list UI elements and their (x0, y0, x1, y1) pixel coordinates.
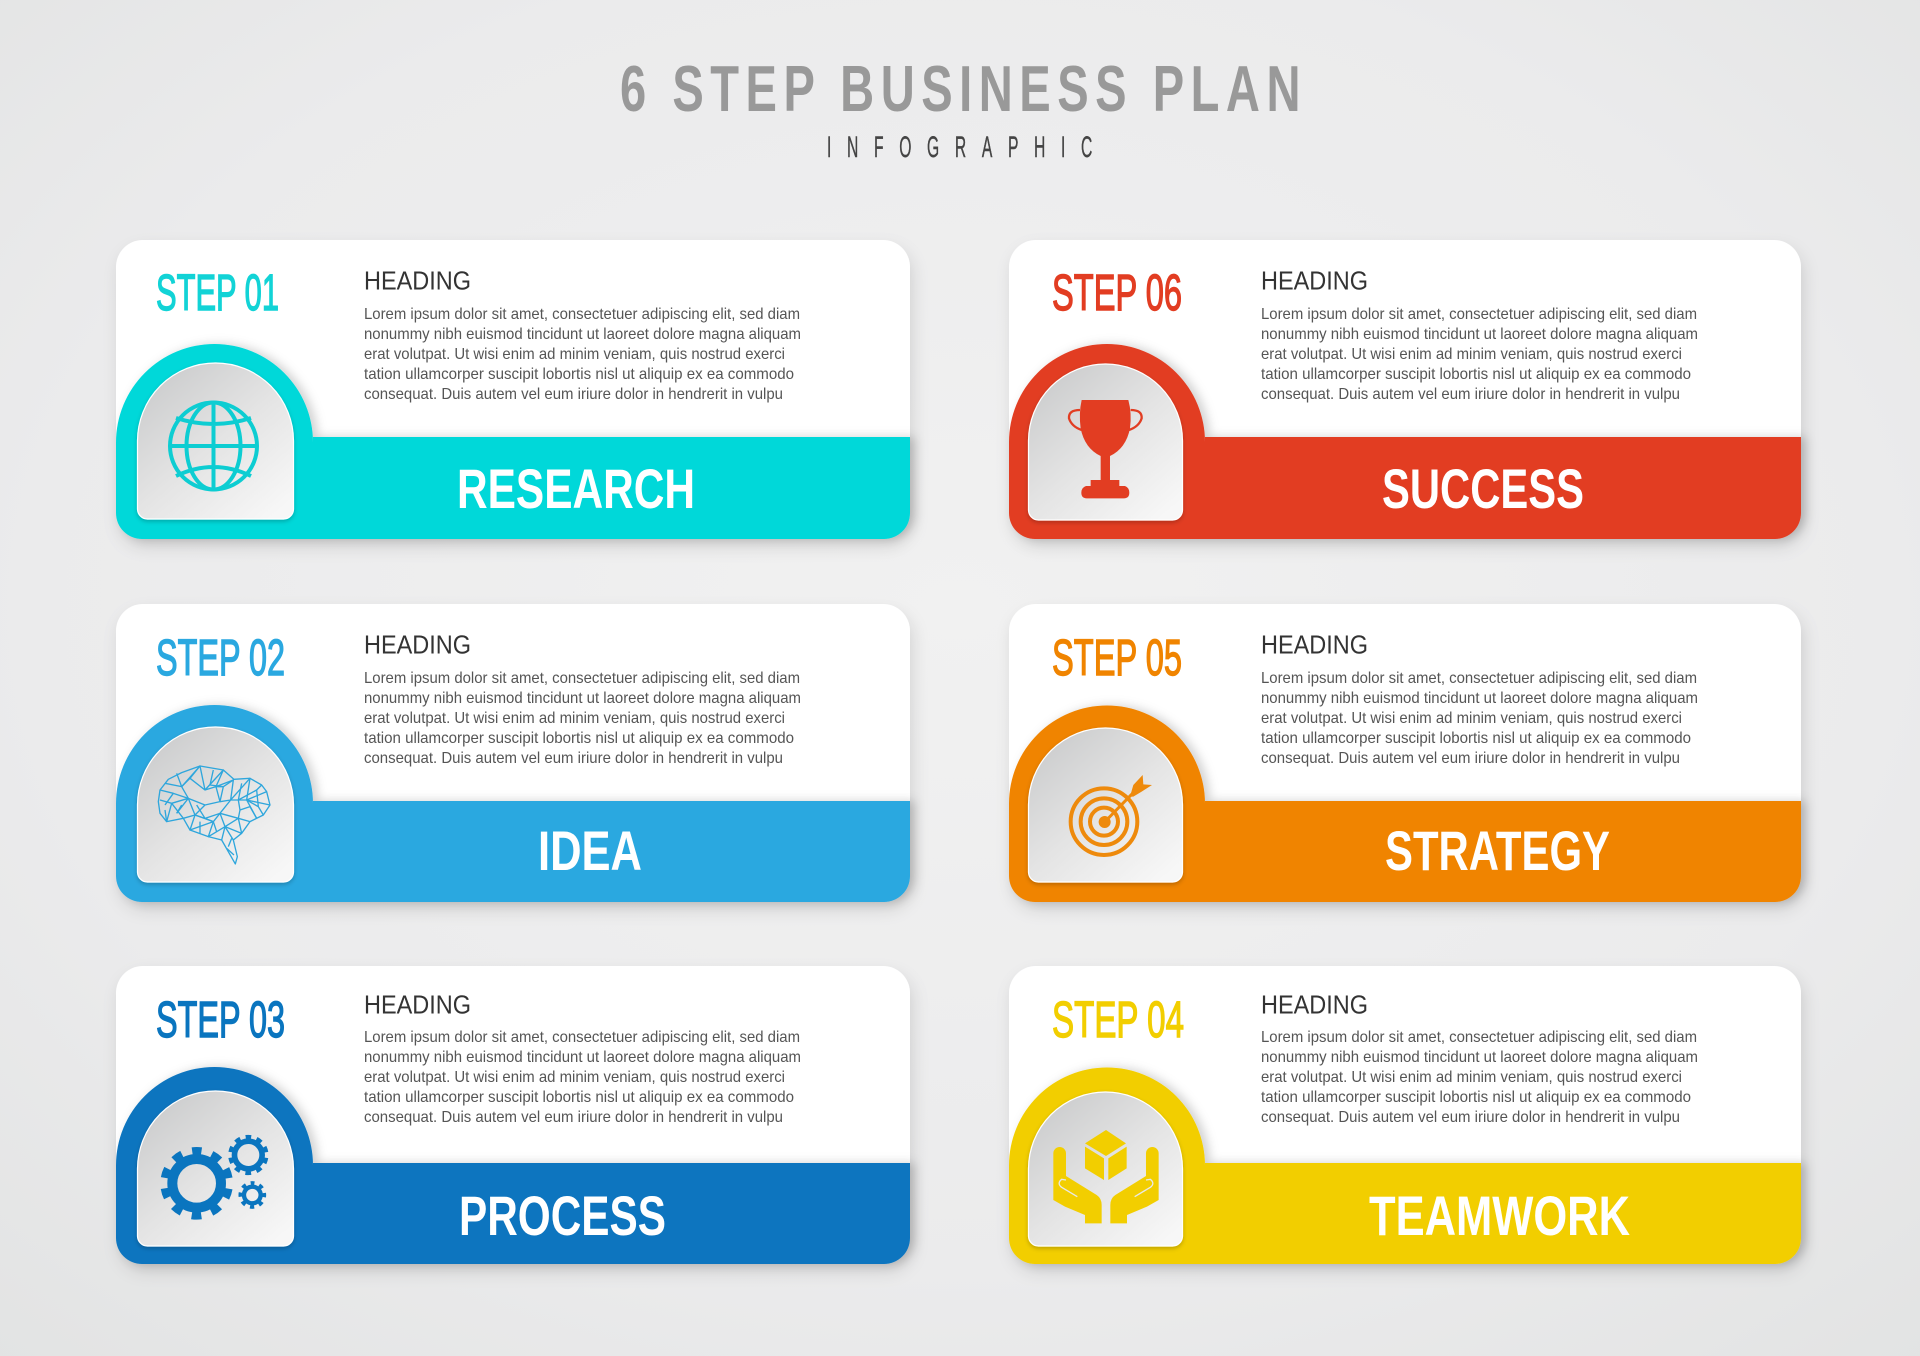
body text (364, 1029, 801, 1126)
heading: HEADING (1261, 266, 1368, 296)
icon well (1028, 1092, 1182, 1246)
body text: nonummy nibh euismod tincidunt ut laoreet dolore magna aliquam (1261, 326, 1698, 343)
body text: tation ullamcorper suscipit lobortis nisl ut aliquip ex ea commodo (1261, 1089, 1691, 1106)
step label: STEP 05 (1052, 629, 1182, 686)
panel: step 06 success (1009, 240, 1801, 539)
body text: Lorem ipsum dolor sit amet, consectetuer adipiscing elit, sed diam (1261, 670, 1697, 687)
colour band with arch (116, 1067, 910, 1264)
band label: TEAMWORK (1369, 1184, 1630, 1247)
card background (116, 240, 910, 539)
colour band with arch (1009, 344, 1801, 539)
body text: erat volutpat. Ut wisi enim ad minim veniam, quis nostrud exerci (364, 710, 785, 727)
body text: Lorem ipsum dolor sit amet, consectetuer adipiscing elit, sed diam (364, 670, 800, 687)
icon: brain (158, 766, 270, 864)
body text: consequat. Duis autem vel eum iriure dolor in hendrerit in vulpu (364, 750, 783, 767)
heading: HEADING (364, 630, 471, 660)
band label: IDEA (538, 819, 642, 882)
heading: HEADING (364, 990, 471, 1020)
colour band with arch (116, 705, 910, 902)
body text: Lorem ipsum dolor sit amet, consectetuer adipiscing elit, sed diam (364, 1029, 800, 1046)
band label: RESEARCH (457, 457, 695, 520)
icon well (1028, 364, 1182, 520)
body text: tation ullamcorper suscipit lobortis nisl ut aliquip ex ea commodo (1261, 366, 1691, 383)
heading: HEADING (1261, 990, 1368, 1020)
card background (1009, 604, 1801, 902)
subtitle: INFOGRAPHIC (827, 131, 1108, 164)
body text: consequat. Duis autem vel eum iriure dolor in hendrerit in vulpu (1261, 1109, 1680, 1126)
title: 6 STEP BUSINESS PLAN (620, 52, 1307, 125)
body text: Lorem ipsum dolor sit amet, consectetuer adipiscing elit, sed diam (1261, 1029, 1697, 1046)
icon well (138, 363, 294, 519)
card background (1009, 240, 1801, 539)
body text: consequat. Duis autem vel eum iriure dolor in hendrerit in vulpu (364, 386, 783, 403)
band label: SUCCESS (1382, 457, 1584, 520)
body text (364, 306, 801, 403)
band label: PROCESS (459, 1184, 666, 1247)
panel: step 01 research (116, 240, 910, 539)
body text: nonummy nibh euismod tincidunt ut laoreet dolore magna aliquam (364, 1049, 801, 1066)
icon: globe (170, 402, 257, 490)
colour band with arch (1009, 1068, 1801, 1264)
band label: STRATEGY (1385, 819, 1610, 882)
body text: erat volutpat. Ut wisi enim ad minim veniam, quis nostrud exerci (364, 346, 785, 363)
body text: nonummy nibh euismod tincidunt ut laoreet dolore magna aliquam (364, 326, 801, 343)
body text (1261, 1029, 1698, 1126)
icon well (1028, 728, 1182, 882)
step label: STEP 03 (156, 991, 285, 1048)
panel: step 05 strategy (1009, 604, 1801, 902)
body text: tation ullamcorper suscipit lobortis nisl ut aliquip ex ea commodo (364, 366, 794, 383)
body text: nonummy nibh euismod tincidunt ut laoreet dolore magna aliquam (364, 690, 801, 707)
body text: erat volutpat. Ut wisi enim ad minim veniam, quis nostrud exerci (1261, 1069, 1682, 1086)
icon: trophy (1069, 400, 1142, 498)
body text: nonummy nibh euismod tincidunt ut laoreet dolore magna aliquam (1261, 1049, 1698, 1066)
step label: STEP 06 (1052, 264, 1182, 321)
step label: STEP 04 (1052, 991, 1184, 1048)
body text: Lorem ipsum dolor sit amet, consectetuer adipiscing elit, sed diam (364, 306, 800, 323)
icon: target (1071, 775, 1152, 855)
step label: STEP 01 (156, 264, 279, 321)
body text: erat volutpat. Ut wisi enim ad minim veniam, quis nostrud exerci (1261, 710, 1682, 727)
panel: step 04 teamwork (1009, 966, 1801, 1264)
panel: step 03 process (116, 966, 910, 1264)
step label: STEP 02 (156, 629, 285, 686)
card background (116, 966, 910, 1264)
body text: erat volutpat. Ut wisi enim ad minim veniam, quis nostrud exerci (364, 1069, 785, 1086)
icon well (138, 1091, 294, 1246)
body text: tation ullamcorper suscipit lobortis nisl ut aliquip ex ea commodo (1261, 730, 1691, 747)
body text: consequat. Duis autem vel eum iriure dolor in hendrerit in vulpu (364, 1109, 783, 1126)
colour band with arch (1009, 706, 1801, 902)
body text (1261, 306, 1698, 403)
body text: consequat. Duis autem vel eum iriure dolor in hendrerit in vulpu (1261, 386, 1680, 403)
body text: consequat. Duis autem vel eum iriure dolor in hendrerit in vulpu (1261, 750, 1680, 767)
body text (364, 670, 801, 767)
heading: HEADING (364, 266, 471, 296)
colour band with arch (116, 344, 910, 539)
icon: gears (164, 1137, 266, 1216)
icon well (138, 727, 294, 882)
card background (116, 604, 910, 902)
heading: HEADING (1261, 630, 1368, 660)
panel: step 02 idea (116, 604, 910, 902)
body text: nonummy nibh euismod tincidunt ut laoreet dolore magna aliquam (1261, 690, 1698, 707)
body text (1261, 670, 1698, 767)
body text: tation ullamcorper suscipit lobortis nisl ut aliquip ex ea commodo (364, 730, 794, 747)
icon: hands holding box (1053, 1130, 1159, 1223)
body text: erat volutpat. Ut wisi enim ad minim veniam, quis nostrud exerci (1261, 346, 1682, 363)
body text: tation ullamcorper suscipit lobortis nisl ut aliquip ex ea commodo (364, 1089, 794, 1106)
card background (1009, 966, 1801, 1264)
body text: Lorem ipsum dolor sit amet, consectetuer adipiscing elit, sed diam (1261, 306, 1697, 323)
